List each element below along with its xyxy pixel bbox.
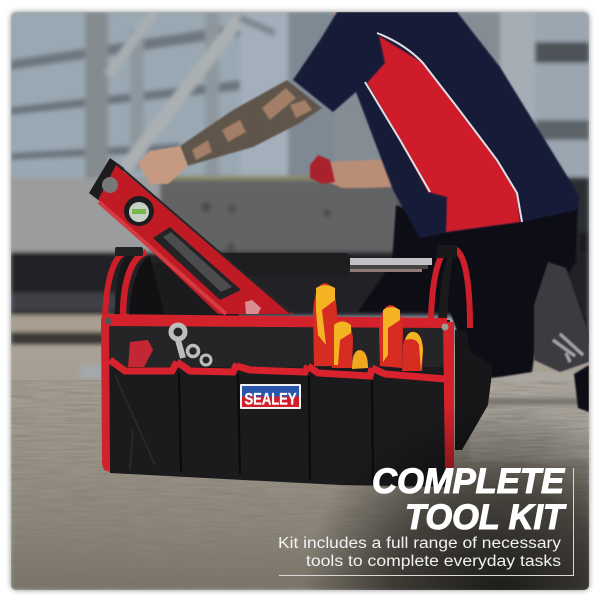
screwdriver 4: [379, 305, 403, 368]
heading: TOOL KIT: [405, 498, 567, 537]
subtext: tools to complete everyday tasks: [306, 553, 561, 570]
carry handle: [222, 253, 432, 272]
caption frame: [279, 468, 574, 576]
right handle arch: [431, 245, 470, 328]
bag body: [107, 316, 450, 487]
level: [89, 158, 293, 314]
boot: [534, 262, 589, 412]
subtext: Kit includes a full range of necessary: [278, 535, 561, 552]
background: wall and railings: [11, 12, 589, 332]
rivets: [104, 318, 112, 324]
left handle arch: [105, 247, 240, 318]
navy shirt: [293, 12, 580, 238]
top red binding: [105, 314, 447, 328]
near forearm and hand: [325, 159, 396, 188]
tattoo highlights: [192, 88, 312, 160]
caption: [278, 462, 574, 576]
screwdrivers: [313, 283, 423, 371]
tattooed arm: [180, 80, 322, 166]
red multi-tool: [128, 340, 153, 367]
SEALEY badge: SEALEY: [244, 390, 297, 408]
side pocket: [455, 330, 493, 450]
upper mesh panel: [109, 325, 446, 367]
level body: [98, 165, 293, 314]
SEALEY badge: [240, 384, 301, 409]
left red edge: [101, 314, 110, 472]
dark vignette behind caption: [11, 380, 589, 590]
level badge: [245, 300, 261, 314]
hand: [138, 146, 188, 184]
screwdriver 3: [352, 350, 368, 369]
level dark top edge: [118, 165, 290, 313]
screwdriver 5: [402, 332, 423, 371]
level bevel: [99, 202, 226, 314]
neck: [333, 12, 352, 16]
red panel: [367, 36, 520, 232]
shirt piping: [365, 33, 522, 222]
screwdriver 2: [331, 319, 353, 368]
heading: [372, 462, 567, 537]
pocket dividers: [115, 372, 373, 484]
screwdriver 1: [313, 283, 337, 366]
level end hole: [102, 177, 118, 193]
floor texture: [11, 380, 589, 590]
right red edge: [443, 322, 454, 470]
heading: COMPLETE: [372, 462, 566, 501]
rear leg and trousers: [358, 205, 578, 378]
vial: [124, 196, 154, 226]
person: [138, 12, 589, 412]
vial bubble: [132, 209, 146, 214]
subtext: [278, 535, 561, 570]
pocket trims: [110, 360, 445, 379]
tape measure: [310, 155, 335, 184]
vial glass: [129, 202, 149, 222]
background: concrete block and ground: [11, 176, 589, 590]
level end cap: [89, 158, 124, 200]
tool bag: [89, 158, 493, 487]
wrenches: [171, 325, 211, 365]
window opening: [163, 232, 232, 292]
level window: [153, 227, 241, 300]
